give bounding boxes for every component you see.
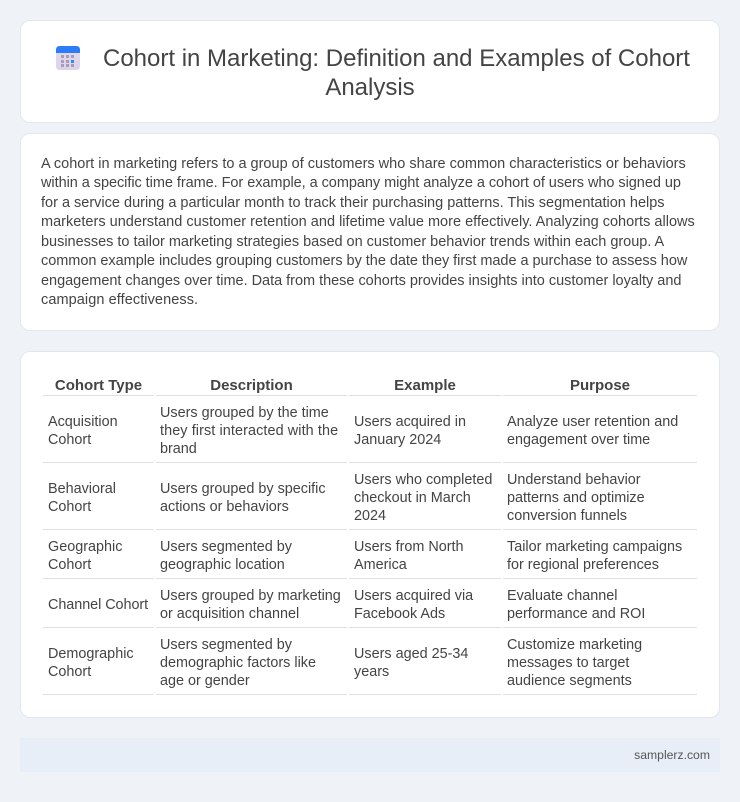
table header: Cohort Type (55, 377, 142, 394)
row: channel: Evaluate channel (507, 588, 617, 604)
row: acquisition: January 2024 (354, 432, 441, 448)
row: geographic: Cohort (48, 557, 91, 573)
row: acquisition: brand (160, 441, 197, 457)
intro paragraph: within a specific time frame. For example, a company might analyze a cohort of users who signed up (41, 175, 681, 191)
row: behavioral: Users grouped by specific (160, 481, 326, 497)
title: Cohort in Marketing: Definition and Examples of Cohort (103, 45, 690, 72)
row: geographic: Users from North (354, 539, 464, 555)
row: demographic (48, 637, 642, 689)
row: acquisition: engagement over time (507, 432, 650, 448)
table header: Example (394, 377, 456, 394)
row: behavioral: Understand behavior (507, 472, 641, 488)
table (43, 377, 697, 695)
table header: Description (210, 377, 293, 394)
row: geographic (48, 539, 682, 573)
row: behavioral: patterns and optimize (507, 490, 645, 506)
row: geographic: Tailor marketing campaigns (507, 539, 682, 555)
intro paragraph: for a service during a particular month to track their purchasing patterns. This segmentation helps (41, 195, 665, 211)
row: geographic: for regional preferences (507, 557, 659, 573)
intro paragraph (41, 156, 695, 308)
row: channel: Channel Cohort (48, 597, 148, 613)
row: demographic: demographic factors like (160, 655, 316, 671)
row: channel: Users grouped by marketing (160, 588, 341, 604)
table header: Purpose (570, 377, 630, 394)
row: channel (48, 588, 645, 622)
row: demographic: Users aged 25-34 (354, 646, 468, 662)
row: demographic: Customize marketing (507, 637, 642, 653)
row: geographic: geographic location (160, 557, 285, 573)
intro paragraph: A cohort in marketing refers to a group of customers who share common characteristics or behaviors (41, 156, 686, 172)
row: acquisition: Analyze user retention and (507, 414, 678, 430)
title (103, 45, 690, 101)
row: acquisition: they first interacted with the (160, 423, 338, 439)
intro paragraph: common example includes grouping customers by the date they first made a purchase to assess how (41, 253, 687, 269)
row: acquisition: Cohort (48, 432, 91, 448)
row: acquisition: Acquisition (48, 414, 118, 430)
row: channel: Users acquired via (354, 588, 473, 604)
footer text: samplerz.com: samplerz.com (634, 748, 710, 762)
row: behavioral: actions or behaviors (160, 499, 289, 515)
row: demographic: age or gender (160, 673, 250, 689)
intro paragraph: campaign effectiveness. (41, 292, 198, 308)
intro paragraph: businesses to tailor marketing strategies based on customer behavior trends within each group. A (41, 234, 664, 250)
row: geographic: Users segmented by (160, 539, 292, 555)
row: channel: performance and ROI (507, 606, 645, 622)
row: behavioral: checkout in March (354, 490, 471, 506)
row: behavioral: 2024 (354, 508, 386, 524)
title: Analysis (325, 74, 415, 101)
row: behavioral: Users who completed (354, 472, 492, 488)
intro paragraph: marketers understand customer retention and lifetime value more effectively. Analyzing cohorts allows (41, 214, 695, 230)
row: demographic: messages to target (507, 655, 629, 671)
row: acquisition: Users grouped by the time (160, 405, 329, 421)
row: geographic: Geographic (48, 539, 122, 555)
row: demographic: Demographic (48, 646, 134, 662)
row: channel: Facebook Ads (354, 606, 445, 622)
row: behavioral (48, 472, 645, 524)
row: behavioral: Cohort (48, 499, 91, 515)
panel: title card (20, 20, 720, 123)
table header (55, 377, 630, 394)
row: demographic: Users segmented by (160, 637, 292, 653)
row: demographic: audience segments (507, 673, 632, 689)
row: demographic: Cohort (48, 664, 91, 680)
panel: intro text card (20, 133, 720, 331)
row: acquisition: Users acquired in (354, 414, 466, 430)
icon: calendar (56, 46, 80, 70)
row: geographic: America (354, 557, 407, 573)
row: channel: or acquisition channel (160, 606, 299, 622)
intro paragraph: engagement changes over time. Data from these cohorts provides insights into customer loyalty and (41, 273, 681, 289)
footer bar (20, 738, 720, 772)
row: acquisition (48, 405, 678, 457)
panel: table card (20, 351, 720, 718)
row: behavioral: conversion funnels (507, 508, 627, 524)
row: behavioral: Behavioral (48, 481, 116, 497)
row: demographic: years (354, 664, 389, 680)
